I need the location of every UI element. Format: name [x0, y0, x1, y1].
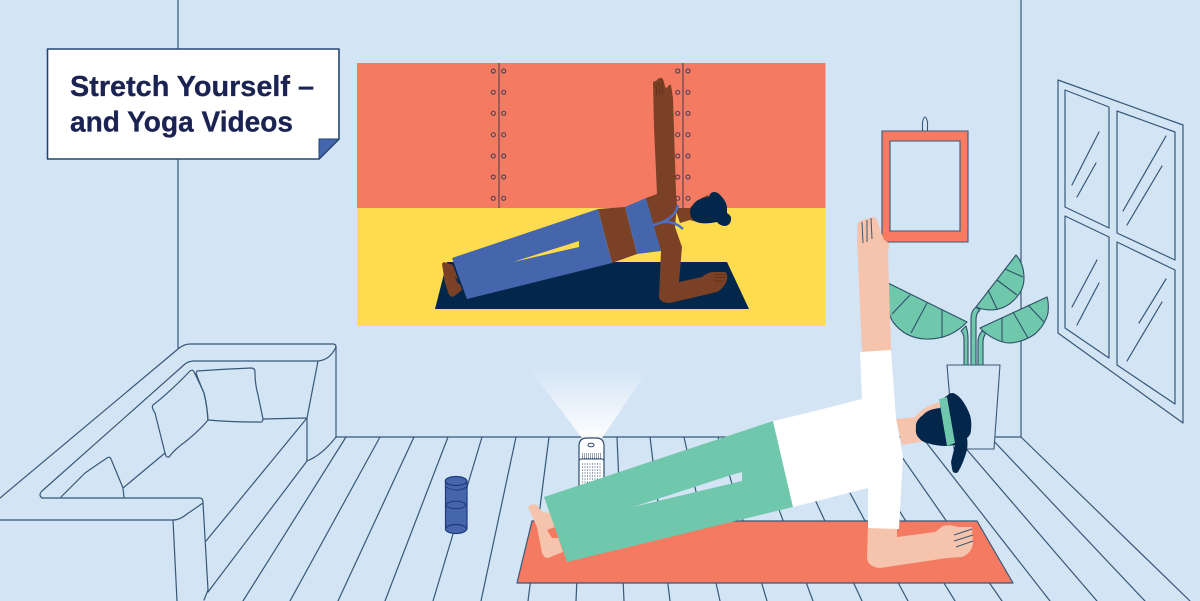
projected video screen — [357, 63, 826, 326]
projector light beam — [528, 367, 650, 438]
shirt — [773, 350, 903, 529]
headband — [939, 397, 955, 446]
wall seams and rivets — [491, 63, 690, 208]
supporting forearm — [867, 525, 973, 568]
hair — [916, 393, 971, 473]
window — [1058, 80, 1183, 423]
title text: Stretch Yourself – — [70, 71, 314, 103]
raised arm — [857, 217, 891, 352]
video yoga mat — [435, 262, 749, 309]
person doing side plank — [528, 217, 973, 568]
title callout — [48, 49, 339, 159]
potted plant — [888, 255, 1048, 449]
yoga mat — [517, 521, 1013, 583]
sofa cushion right — [196, 368, 263, 422]
back foot — [528, 504, 563, 558]
sofa — [0, 344, 336, 601]
water bottle — [445, 476, 467, 534]
leggings — [544, 421, 793, 562]
neck and face — [896, 402, 945, 445]
projector — [579, 438, 604, 487]
picture frame — [882, 117, 968, 242]
video instructor — [442, 78, 731, 303]
title text: and Yoga Videos — [70, 106, 293, 138]
